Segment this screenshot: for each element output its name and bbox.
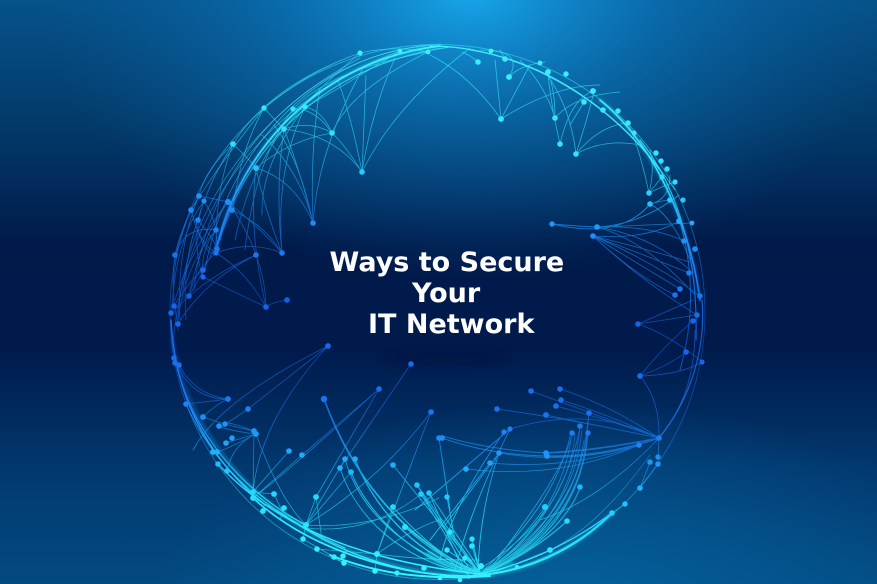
connections: upper left — [191, 48, 470, 307]
nodes: upper right — [475, 49, 703, 299]
title line 2: Your — [411, 278, 481, 309]
connections: lower left — [253, 364, 480, 571]
connections: upper right — [430, 50, 700, 315]
connections: bottom right fan — [478, 413, 625, 574]
network sphere — [170, 44, 705, 580]
connections: bottom hub — [324, 399, 510, 576]
nodes: upper left — [171, 49, 430, 310]
connections: right hub — [442, 300, 702, 520]
nodes: lower left — [168, 310, 442, 576]
title shadow — [384, 355, 508, 363]
title — [330, 247, 564, 340]
sphere rim strands — [170, 44, 705, 580]
title line 1: Ways to Secure — [330, 247, 564, 278]
nodes: lower right — [438, 312, 705, 582]
title line 3: IT Network — [368, 309, 535, 340]
sphere rim glow — [172, 46, 700, 575]
connections: far left — [171, 144, 328, 525]
network nodes — [168, 49, 705, 582]
